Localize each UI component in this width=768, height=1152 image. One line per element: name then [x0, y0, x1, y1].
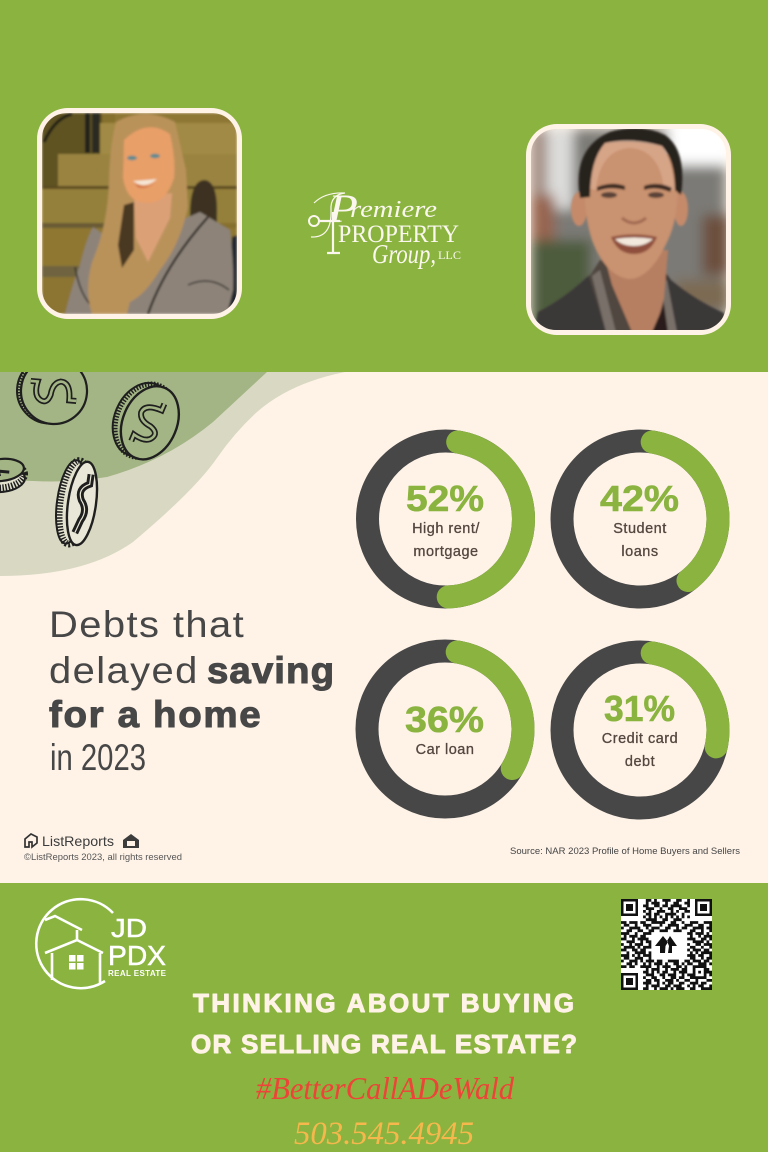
- logo word PROPERTY: PROPERTY: [338, 221, 459, 248]
- call to action line 1: THINKING ABOUT BUYING: [193, 988, 574, 1018]
- logo house in circle: [36, 899, 113, 988]
- QR code: [621, 899, 712, 990]
- logo script word Group: Group,: [372, 239, 436, 269]
- icon: ListReports mark: [25, 834, 37, 847]
- logo script capital P: P: [327, 186, 358, 231]
- heading line 2 bold: saving: [207, 650, 335, 691]
- sweater: [65, 212, 233, 314]
- decorative wave: sage green: [0, 372, 267, 482]
- value 42%: 42%: [600, 478, 679, 519]
- hair: [88, 114, 188, 314]
- logo script word remiere: remiere: [350, 197, 437, 223]
- QR finder patterns: [621, 899, 712, 990]
- value 31%: 31%: [604, 688, 675, 729]
- label High rent/ mortgage: High rent/: [412, 521, 480, 537]
- source note: Source: NAR 2023 Profile of Home Buyers and Sellers: [510, 846, 740, 857]
- label Student loans: Student: [613, 521, 667, 537]
- phone number: 503.545.4945: [294, 1116, 474, 1152]
- logo window: [69, 955, 84, 970]
- face: [123, 127, 174, 203]
- logo key icon: [309, 193, 345, 253]
- cream middle panel: [0, 372, 768, 883]
- label Student loans: loans: [621, 544, 659, 560]
- chest: [134, 193, 172, 262]
- heading: Debts that delayed saving for a home in 2023: [49, 604, 335, 778]
- logo: Premiere Property Group: [309, 186, 461, 269]
- value 52%: 52%: [406, 478, 484, 519]
- label Credit card debt: debt: [625, 754, 655, 770]
- donut: 36% car loan: [356, 640, 534, 818]
- heading line 1: Debts that: [49, 604, 245, 646]
- call to action heading: [191, 988, 577, 1059]
- donut: 42% student loans: [551, 430, 729, 608]
- coin: lower middle: [55, 457, 98, 548]
- top green band: [0, 0, 768, 372]
- coin: top left: [16, 372, 88, 426]
- label Car loan: Car loan: [416, 742, 474, 758]
- logo: JD PDX Real Estate: [36, 899, 167, 988]
- coin: upper right: [112, 382, 180, 461]
- copyright line: ©ListReports 2023, all rights reserved: [24, 852, 182, 863]
- bottom green band: [0, 883, 768, 1152]
- QR modules: [621, 900, 712, 989]
- label High rent/ mortgage: mortgage: [413, 544, 479, 560]
- donut: 52% high rent or mortgage: [356, 430, 535, 608]
- decorative wave: pale: [0, 372, 345, 576]
- photo: man agent: [526, 120, 731, 335]
- donut: 31% credit card debt: [551, 641, 729, 819]
- heading line 3 bold: for a home: [49, 694, 262, 735]
- coin: left edge: [0, 457, 26, 494]
- heading line 2 regular: delayed: [49, 650, 199, 692]
- heading line 4: in 2023: [50, 737, 146, 778]
- brand: ListReports: [24, 833, 182, 863]
- logo PDX: PDX: [108, 940, 166, 971]
- hashtag: #BetterCallADeWald: [256, 1070, 515, 1106]
- coin illustrations: [0, 372, 180, 548]
- logo LLC: LLC: [438, 248, 461, 262]
- label Credit card debt: Credit card: [602, 731, 678, 747]
- photo: woman agent: [37, 108, 242, 319]
- logo REAL ESTATE: REAL ESTATE: [108, 969, 167, 978]
- icon: equal housing: [123, 834, 139, 848]
- call to action line 2: OR SELLING REAL ESTATE?: [191, 1029, 577, 1059]
- logo JD: JD: [111, 913, 147, 943]
- value 36%: 36%: [405, 699, 484, 740]
- QR centre arrows icon: [655, 936, 677, 953]
- ListReports wordmark: ListReports: [42, 833, 114, 849]
